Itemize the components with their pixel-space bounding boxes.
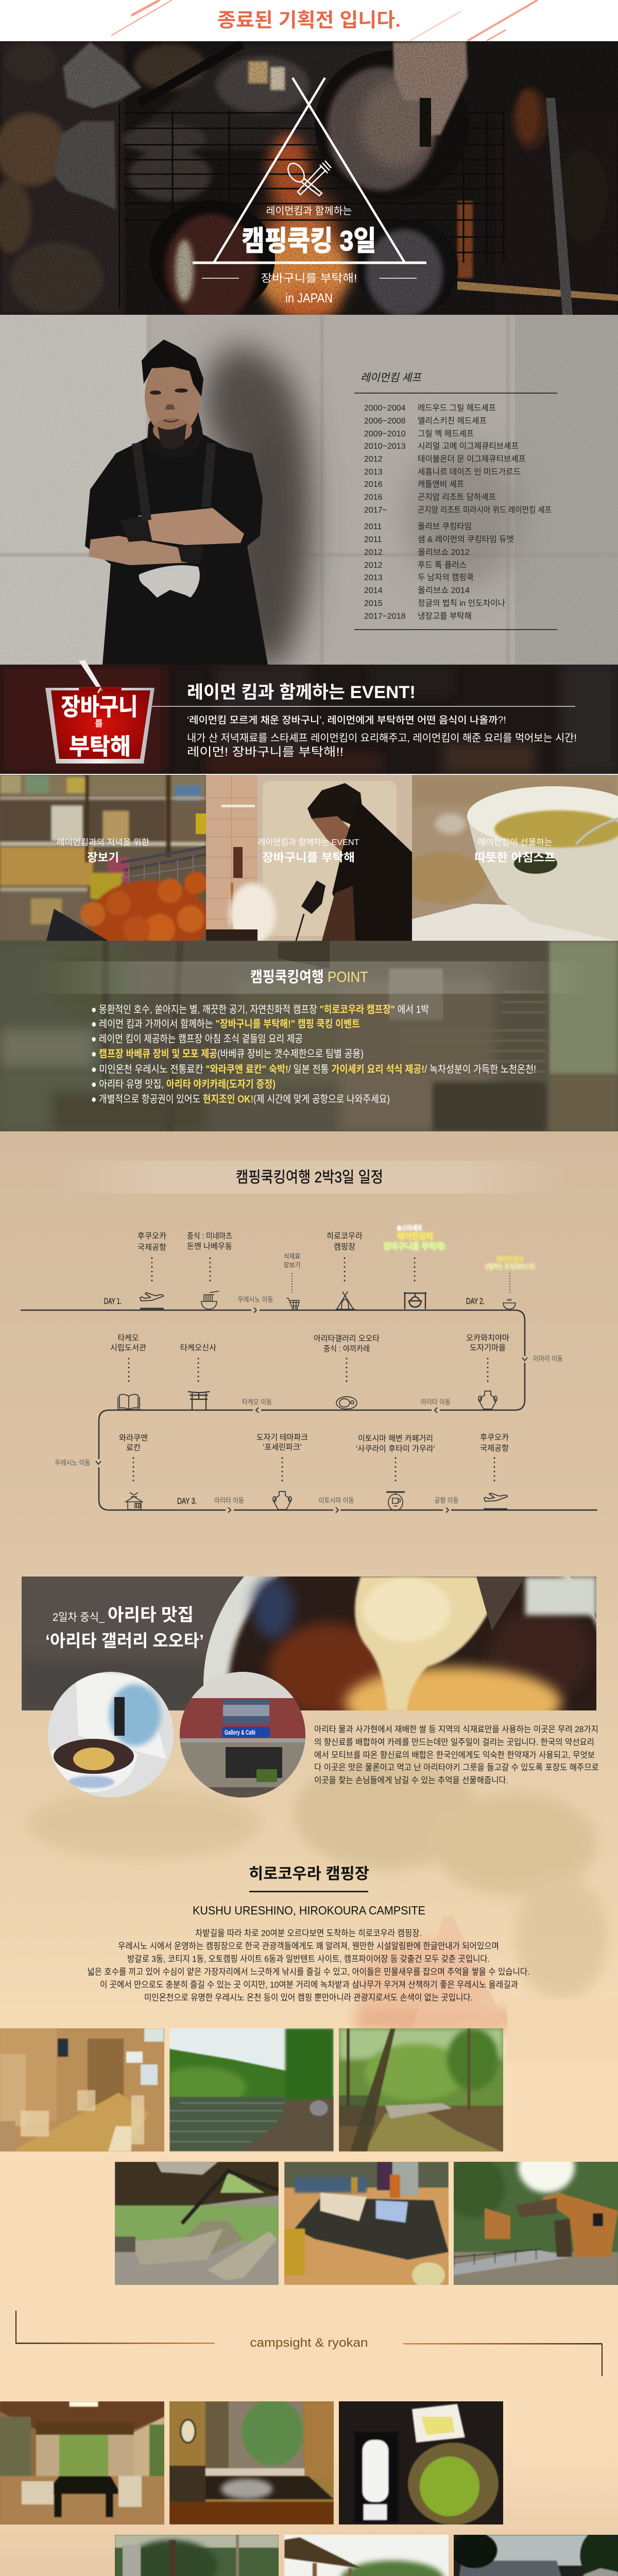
career list: 샘 & 레이먼의 쿠킹타임 듀엣 xyxy=(418,535,514,544)
panel: trip points xyxy=(0,941,618,1131)
stop labels: 아리타갤러리 오오타 xyxy=(314,1334,380,1343)
stop labels: 캠핑장 xyxy=(334,1242,355,1251)
photo circle: gallery cafe storefront xyxy=(180,1672,305,1798)
campsite description: 넓은 호수를 끼고 있어 수심이 얕은 가장자리에서 느긋하게 낚시를 즐길 수 있고, 아이들은 민물새우를 잡으며 추억을 쌓을 수 있습니다. xyxy=(88,1967,529,1977)
photo: outdoor onsen xyxy=(284,2535,452,2576)
chef name heading: 레이먼킴 셰프 xyxy=(360,372,422,384)
stop labels: 후쿠오카 xyxy=(138,1231,166,1241)
route move labels: 타케오 이동 xyxy=(242,1398,272,1406)
points heading: 캠핑쿡킹여행 POINT xyxy=(250,969,368,986)
career list: 2009~2010 xyxy=(364,430,406,438)
route move labels: 우레시노 이동 xyxy=(238,1296,273,1303)
market background photo xyxy=(0,665,618,774)
icon: red shopping basket logo xyxy=(45,660,154,764)
curry description: 이곳을 찾는 손님들에게 남길 수 있는 추억을 선물해줍니다. xyxy=(314,1775,508,1785)
stop labels: 타케오신사 xyxy=(180,1343,216,1352)
event heading: 레이먼 킴과 함께하는 EVENT! xyxy=(187,683,416,702)
stop labels: 타케오 xyxy=(117,1333,139,1343)
icon: red shopping basket logo: 장바구니 xyxy=(61,693,138,720)
hero tagline: 장바구니를 부탁해! xyxy=(261,273,357,284)
icon: cafe sign xyxy=(386,1492,405,1511)
chef photo on concrete wall xyxy=(0,315,618,665)
campsite description xyxy=(88,1928,529,2003)
career list: 곤지암 리조트 담하셰프 xyxy=(418,493,496,502)
stop labels: 국제공항 xyxy=(480,1444,509,1453)
curry heading: ‘아리타 갤러리 오오타’ xyxy=(45,1631,204,1650)
points list xyxy=(91,1004,536,1105)
panel: curry restaurant xyxy=(22,1577,598,1798)
photo: campsite forest path xyxy=(339,2028,503,2151)
career list: 캐틀앤비 셰프 xyxy=(418,480,464,489)
panel: ryokan background xyxy=(0,2391,618,2576)
panel: basket cooking event: 장바구니를 부탁해 xyxy=(262,851,355,864)
curry description xyxy=(314,1724,599,1785)
route move labels: 이마리 이동 xyxy=(533,1355,563,1363)
stop labels: 국제공항 xyxy=(138,1243,166,1252)
panel: chef profile xyxy=(0,315,618,670)
career list: 2013 xyxy=(364,468,383,477)
career list: 2000~2004 xyxy=(364,404,406,413)
icon: teepee tent xyxy=(336,1292,355,1310)
icon: crossed spoon and fork xyxy=(285,160,331,196)
caption: soup: 레이먼킴이 선물하는 xyxy=(478,838,552,847)
panel: morning soup: 따뜻한 아침스프 xyxy=(475,851,555,864)
day labels: DAY 3. xyxy=(177,1496,197,1506)
icon: vase xyxy=(478,1391,497,1409)
career list: 2012 xyxy=(364,455,383,464)
hero subtitle: 레이먼킴과 함께하는 xyxy=(266,205,352,217)
itinerary heading: 캠핑쿡킹여행 2박3일 일정 xyxy=(236,1169,383,1186)
highlighted stop: basket event xyxy=(383,1224,446,1251)
points list: ● 몽환적인 호수, 쏟아지는 별, 깨끗한 공기, 자연친화적 캠프장 "히로코우라 캠프장" 에서 1박 xyxy=(91,1004,429,1015)
campsite description: 이 곳에서 만으로도 충분히 즐길 수 있는 곳 이지만, 10여분 거리에 녹차밭과 삼나무가 우거져 산책하기 좋은 우레시노 올레길과 xyxy=(100,1980,518,1990)
highlighted stop: basket event: ★스타셰프 xyxy=(397,1224,422,1232)
photo: bbq table xyxy=(284,2162,449,2285)
career list: 두 남자의 캠핑쿡 xyxy=(418,573,474,582)
highlighted stop: basket event: 장바구니를 부탁해! xyxy=(383,1242,446,1251)
stop labels: ‘포세린파크’ xyxy=(263,1443,302,1452)
stop labels: 와라쿠엔 xyxy=(119,1433,148,1443)
curry description: 의 향신료를 배합하여 카레를 만드는데만 일주일이 걸리는 곳입니다. 한국의 약선요리 xyxy=(314,1737,594,1747)
career list: 2016 xyxy=(364,493,383,502)
route move labels: 아리타 이동 xyxy=(214,1497,244,1504)
panel: grocery shopping xyxy=(0,775,209,958)
stop labels: 중식 : 야끼카레 xyxy=(323,1344,370,1353)
highlighted stop: basket event: 레이먼킴의 xyxy=(397,1232,433,1241)
icon: breakfast bowl xyxy=(503,1299,516,1309)
icon: noodle bowl xyxy=(201,1291,219,1309)
icon: hanging pot xyxy=(404,1292,426,1309)
career list: 레드우드 그릴 헤드셰프 xyxy=(418,403,496,413)
stop labels: 도자기마을 xyxy=(470,1343,506,1352)
career list: 2014 xyxy=(364,586,383,595)
icon: red shopping basket logo: 를 xyxy=(95,719,103,728)
career list: 시리얼 고메 이그제큐티브셰프 xyxy=(418,442,519,451)
career list: 2015 xyxy=(364,599,383,608)
icon: shopping cart xyxy=(286,1298,299,1309)
career list: 2013 xyxy=(364,573,383,582)
icon: plane arrival xyxy=(484,1493,507,1509)
stop labels: 돈멘 나베우동 xyxy=(187,1242,232,1251)
day labels: DAY 1. xyxy=(104,1296,122,1306)
photo: tatami room xyxy=(0,2401,164,2524)
stop labels: 식재료 xyxy=(283,1252,301,1260)
stop labels: 시립도서관 xyxy=(110,1343,146,1352)
career list: 2012 xyxy=(364,561,383,570)
icon: red shopping basket logo: 부탁해 xyxy=(69,734,131,759)
panel: basket cooking event xyxy=(206,775,412,945)
career list: 올리브 쿠킹타임 xyxy=(418,522,472,531)
curry heading: 2일차 중식_ xyxy=(53,1612,105,1623)
photo: cabin interior xyxy=(0,2028,164,2151)
career list: 2012 xyxy=(364,548,383,557)
panel: hero campfire xyxy=(0,41,618,330)
stop labels: 료칸 xyxy=(126,1443,141,1452)
panel: campsite background xyxy=(0,1710,618,2061)
banner heading: 종료된 기획전 입니다. xyxy=(217,10,401,31)
points list: ● 아리타 유명 맛집, 아리타 야키카레(도자기 증정) xyxy=(91,1078,276,1090)
photo circle: gallery cafe storefront: Gallery & Café xyxy=(225,1728,255,1736)
career list xyxy=(354,393,557,630)
photo: bbq shelter xyxy=(115,2162,279,2285)
points list: ● 레이먼 킴이 제공하는 캠프장 아침 조식 곁들임 요리 제공 xyxy=(91,1033,303,1045)
day labels xyxy=(104,1296,485,1506)
event description xyxy=(187,715,577,758)
photo: supermarket cart xyxy=(0,775,206,941)
photo: foggy forest cabin xyxy=(0,941,618,1131)
highlighted stop: breakfast xyxy=(485,1256,535,1270)
stop labels: 중식 : 미네마츠 xyxy=(187,1231,232,1241)
panel: morning soup xyxy=(399,775,618,941)
icon: porcelain vase xyxy=(273,1492,291,1510)
career list: 푸드 톡 플러스 xyxy=(418,561,467,570)
career list: 2011 xyxy=(364,522,382,531)
panel: itinerary xyxy=(0,1131,618,1710)
career list: 2016 xyxy=(364,480,383,489)
icon: torii gate xyxy=(188,1392,210,1410)
caption: basket event: 레이먼킴과 함께하는 EVENT xyxy=(258,838,359,847)
curry description: 다 이곳은 맛은 물론이고 먹고 난 아리타야키 그릇을 들고갈 수 있도록 포장도 해주므로 xyxy=(314,1762,599,1772)
career list: 2017~2018 xyxy=(364,612,406,621)
stop labels: 히로코우라 xyxy=(327,1231,363,1241)
career list: 올리브쇼 2012 xyxy=(418,548,470,557)
campsite description: 우레시노 시에서 운영하는 캠핑장으로 한국 관광객들에게도 꽤 알려져, 웬만한 시설알림판에 한글안내가 되어있으며 xyxy=(118,1941,499,1951)
career list: 곤지암 리조트 미라시아 위드 레이먼킴 셰프 xyxy=(418,505,552,515)
points list: ● 개별적으로 항공권이 있어도 현지조인 OK!(제 시간에 맞게 공항으로 나와주세요) xyxy=(91,1093,390,1105)
campsite heading: 히로코우라 캠핑장 xyxy=(249,1866,369,1883)
event description: 레이먼! 장바구니를 부탁해!! xyxy=(187,745,344,758)
stop labels xyxy=(110,1231,509,1453)
career list: 그릴 멕 헤드셰프 xyxy=(418,429,474,438)
photo: cup of soup and bread xyxy=(412,775,618,941)
points list: ● 캠프장 바베큐 장비 및 모포 제공(바베큐 장비는 갯수제한으로 팀별 공용) xyxy=(91,1048,364,1060)
highlighted stop: breakfast: 선물하는 조식(국아스프) xyxy=(485,1263,535,1270)
career list: 냉장고를 부탁해 xyxy=(418,612,472,621)
curry heading: 아리타 맛집 xyxy=(108,1605,194,1625)
hero location: in JAPAN xyxy=(285,291,333,306)
route line xyxy=(21,1310,597,1510)
route move labels: 우레시노 이동 xyxy=(55,1459,91,1467)
photo: private bath xyxy=(169,2401,334,2524)
stop labels: 이토시마 해변 카페거리 xyxy=(358,1434,433,1443)
hero photo: grill over a campfire xyxy=(0,41,618,315)
curry heading xyxy=(45,1605,204,1650)
event description: 내가 산 저녁재료를 스타셰프 레이먼킴이 요리해주고, 레이먼킴이 해준 요리를 먹어보는 시간! xyxy=(187,732,577,744)
event description: ‘레이먼킴 모르게 채운 장바구니’, 레이먼에게 부탁하면 어떤 음식이 나올까?! xyxy=(187,715,506,726)
photo: log cabin xyxy=(454,2162,618,2285)
stop labels: 도자기 테마파크 xyxy=(256,1433,308,1442)
panel: event banner xyxy=(0,660,618,774)
points list: ● 미인온천 우레시노 전통료칸 "와라쿠엔 료칸" 숙박!/ 일본 전통 가이세키 요리 석식 제공!/ 녹차성분이 가득한 노천온천! xyxy=(91,1063,536,1075)
career list: 테이블온더 문 이그제큐티브셰프 xyxy=(418,454,526,464)
divider label: campsight & ryokan xyxy=(250,2336,368,2350)
campsite description: 미인온천으로 유명한 우레시노 온천 등이 있어 캠핑 뿐만아니라 관광지로서도 손색이 없는 곳입니다. xyxy=(144,1993,473,2003)
career list: 정글의 법칙 in 인도차이나 xyxy=(418,599,505,608)
route move labels: 아리타 이동 xyxy=(421,1398,451,1406)
route move labels: 공항 이동 xyxy=(435,1497,458,1504)
curry description: 아리타 물과 사가현에서 재배한 쌀 등 지역의 식재료만을 사용하는 이곳은 무려 28가지 xyxy=(314,1724,598,1734)
photo: chef cooking with flame xyxy=(206,775,412,941)
career list: 2011 xyxy=(364,535,382,544)
photo: matcha set xyxy=(339,2401,503,2524)
career list: 세흠니르 데이즈 인 미드가르드 xyxy=(418,467,521,477)
icon: curry plate xyxy=(336,1397,357,1409)
career list: 앨리스키친 헤드셰프 xyxy=(418,416,487,426)
highlighted stop: breakfast: 레이먼킴이 xyxy=(496,1256,523,1263)
icon: open book xyxy=(118,1394,140,1410)
photo circle: curry bowl and box xyxy=(48,1672,174,1798)
career list: 2017~ xyxy=(364,506,387,515)
dotted connectors xyxy=(129,1258,494,1485)
photo: garden pond xyxy=(115,2535,279,2576)
photo: campsite lake xyxy=(169,2028,334,2151)
campsite description: 차밭길을 따라 차로 20여분 오르다보면 도착하는 히로코우라 캠핑장. xyxy=(195,1928,422,1938)
career list: 올리브쇼 2014 xyxy=(418,586,470,595)
stop labels: 장보기 xyxy=(283,1261,301,1269)
career list: 2010~2013 xyxy=(364,442,406,451)
route move labels: 이토시마 이동 xyxy=(318,1497,354,1504)
hero title: 캠핑쿡킹 3일 xyxy=(242,226,376,257)
stop labels: 오카와치야마 xyxy=(466,1333,509,1343)
tent logo triangle xyxy=(193,78,426,278)
icon: ryokan house xyxy=(126,1493,142,1510)
career list: 2006~2008 xyxy=(364,417,406,426)
icon: plane departure xyxy=(140,1293,164,1309)
campsite description: 방갈로 3동, 코티지 1동, 오토캠핑 사이트 6동과 일반텐트 사이트, 캠프파이어장 등 갖출건 모두 갖춘 곳입니다. xyxy=(127,1954,490,1964)
photo: cheese curry spoon xyxy=(22,1577,596,1710)
panel: campsite intro xyxy=(88,1866,529,2003)
points list: ● 레이먼 킴과 가까이서 함께하는 "장바구니를 부탁해!" 캠핑 쿡킹 이벤트 xyxy=(91,1018,360,1030)
faded lake and trees photo xyxy=(0,1757,608,2040)
caption: grocery: 레이먼킴과의 저녁을 위한 xyxy=(57,838,149,847)
day labels: DAY 2. xyxy=(466,1296,485,1306)
stop labels: ‘사쿠라이 후타미 가우라’ xyxy=(356,1444,435,1453)
panel: grocery shopping: 장보기 xyxy=(87,851,119,864)
curry description: 에서 모티브를 따온 향신료의 배합은 한국인에게도 익숙한 한약재가 사용되고, 무엇보 xyxy=(314,1750,595,1760)
route move labels xyxy=(55,1296,563,1504)
stop labels: 후쿠오카 xyxy=(480,1433,509,1442)
campsite english name: KUSHU URESHINO, HIROKOURA CAMPSITE xyxy=(193,1904,425,1917)
direction arrows xyxy=(96,1308,527,1513)
photo: ryokan entrance xyxy=(451,2530,618,2576)
closed-event banner xyxy=(111,0,538,41)
